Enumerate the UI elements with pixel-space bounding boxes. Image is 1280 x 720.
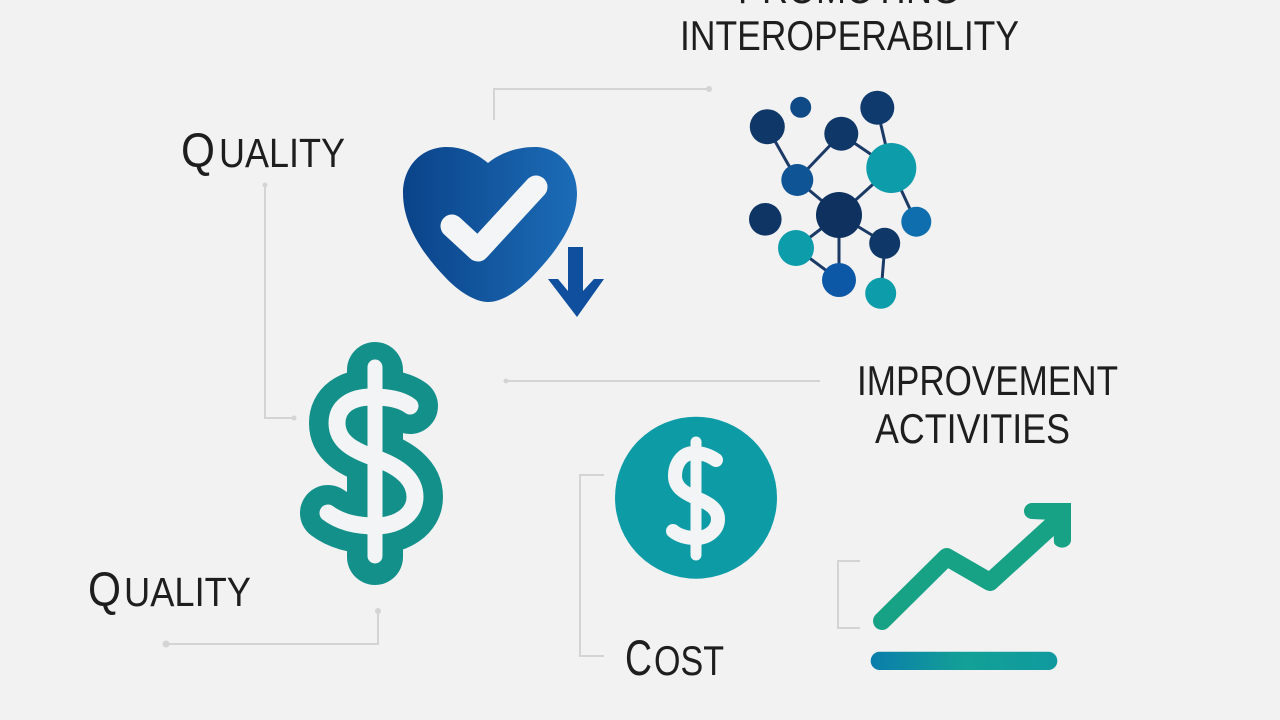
- heading: quality lower: Q: [88, 564, 121, 617]
- bar: gradient baseline: [871, 652, 1057, 670]
- heading: improvement activities: ACTIVITIES: [875, 405, 1070, 452]
- icon: network of nodes: [749, 91, 931, 309]
- connector: lower quality: [162, 608, 381, 648]
- icon: heart with check: [403, 147, 577, 302]
- heading: cost: OST: [654, 637, 724, 684]
- heading: promoting interoperability: INTEROPERABILITY: [680, 12, 1019, 59]
- heading: promoting interoperability: [680, 0, 1019, 59]
- heading: cost: [625, 630, 724, 686]
- icon: dollar coin: [615, 417, 777, 579]
- heading: quality upper: [181, 125, 345, 178]
- heading: quality lower: UALITY: [124, 569, 251, 615]
- heading: quality upper: Q: [181, 125, 215, 178]
- connector: dollar to improvement: [504, 378, 820, 384]
- bracket: cost: [580, 475, 604, 656]
- heading: quality upper: UALITY: [219, 130, 345, 176]
- heading: improvement activities: IMPROVEMENT: [857, 357, 1118, 404]
- connector: heart to interoperability: [494, 86, 712, 120]
- connector: quality to dollar: [262, 182, 296, 420]
- heading: improvement activities: [857, 357, 1118, 452]
- heading: cost: C: [625, 630, 652, 686]
- icon: down arrow: [548, 247, 604, 317]
- bracket: chart: [838, 561, 860, 628]
- icon: outlined dollar sign: [328, 367, 415, 557]
- icon: rising trend arrow: [882, 503, 1071, 621]
- heading: quality lower: [88, 564, 251, 617]
